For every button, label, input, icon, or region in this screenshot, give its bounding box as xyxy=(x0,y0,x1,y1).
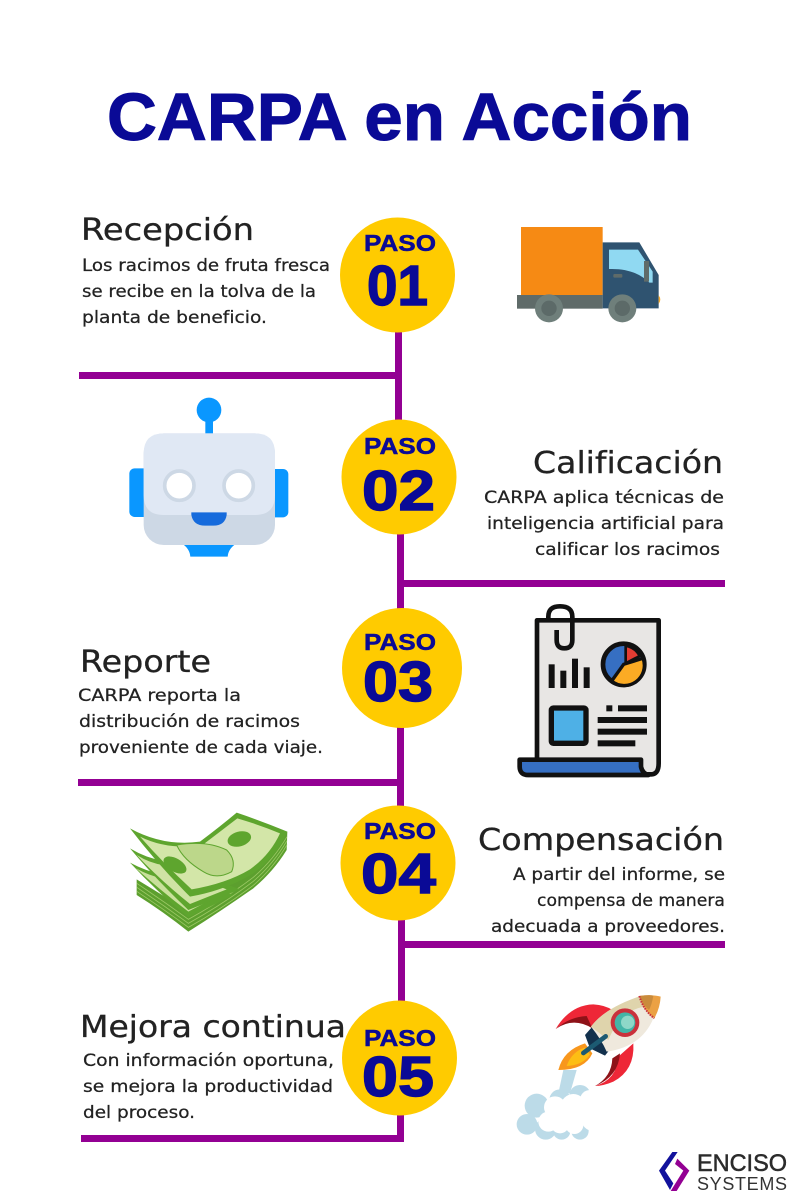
heading: Recepción: Recepción xyxy=(81,213,254,248)
title: CARPA en Acción xyxy=(107,80,692,155)
text: Mejora continua description: Con información oportuna, xyxy=(83,1051,334,1071)
text: Recepción description: planta de beneficio. xyxy=(82,308,267,328)
icon: robot head xyxy=(129,398,288,557)
badge: paso 01 xyxy=(340,218,455,332)
icon: stack of banknotes xyxy=(130,813,287,932)
text: Reporte description: proveniente de cada viaje. xyxy=(79,738,323,758)
icon: rocket with smoke xyxy=(517,995,661,1142)
badge: paso 01: 01 xyxy=(367,254,428,318)
step 2: Calificación xyxy=(129,398,724,560)
logo wordmark: ENCISO xyxy=(697,1150,787,1177)
text: Compensación description: compensa de manera xyxy=(537,891,725,911)
text: Recepción description: Los racimos de fruta fresca xyxy=(82,256,330,276)
step 3: Reporte xyxy=(78,606,659,775)
badge: paso 01: PASO xyxy=(364,230,436,256)
badge: paso 02: 02 xyxy=(362,459,435,523)
heading: Mejora continua: Mejora continua xyxy=(80,1010,346,1045)
icon: delivery truck xyxy=(517,227,660,322)
step 1: Recepción xyxy=(81,213,660,332)
text: Recepción description: se recibe en la tolva de la xyxy=(82,282,316,302)
badge: paso 05: PASO xyxy=(364,1025,436,1051)
text: Compensación description: A partir del informe, se xyxy=(513,865,725,885)
badge: paso 05 xyxy=(342,1000,457,1116)
text: Recepción description xyxy=(82,256,330,328)
text: Compensación description xyxy=(491,865,725,937)
step 4: Compensación xyxy=(130,806,725,937)
text: Reporte description xyxy=(78,686,323,758)
heading: Calificación: Calificación xyxy=(533,446,723,481)
text: Calificación description: inteligencia artificial para xyxy=(487,514,724,534)
step 5: Mejora continua xyxy=(80,995,661,1142)
logo: Enciso Systems xyxy=(659,1150,787,1194)
badge: paso 04: PASO xyxy=(364,818,436,844)
text: Mejora continua description: del proceso. xyxy=(83,1103,195,1123)
text: Calificación description xyxy=(484,488,724,560)
text: Reporte description: CARPA reporta la xyxy=(78,686,241,706)
badge: paso 05: 05 xyxy=(362,1045,434,1109)
badge: paso 03 xyxy=(342,608,462,728)
timeline connector xyxy=(78,325,725,1142)
text: Calificación description: calificar los racimos xyxy=(535,540,720,560)
badge: paso 03: PASO xyxy=(364,629,436,655)
text: Mejora continua description xyxy=(83,1051,334,1123)
badge: paso 02 xyxy=(342,420,456,534)
text: Calificación description: CARPA aplica técnicas de xyxy=(484,488,724,508)
heading: Reporte: Reporte xyxy=(80,645,211,680)
text: Reporte description: distribución de racimos xyxy=(79,712,300,732)
text: Compensación description: adecuada a proveedores. xyxy=(491,917,725,937)
icon: report document xyxy=(520,606,659,775)
logo subtitle: SYSTEMS xyxy=(697,1174,787,1194)
badge: paso 02: PASO xyxy=(364,433,436,459)
badge: paso 04 xyxy=(340,806,456,920)
badge: paso 03: 03 xyxy=(363,650,433,714)
text: Mejora continua description: se mejora la productividad xyxy=(83,1077,333,1097)
badge: paso 04: 04 xyxy=(361,842,436,906)
logo mark xyxy=(659,1152,689,1191)
heading: Compensación: Compensación xyxy=(478,823,724,858)
